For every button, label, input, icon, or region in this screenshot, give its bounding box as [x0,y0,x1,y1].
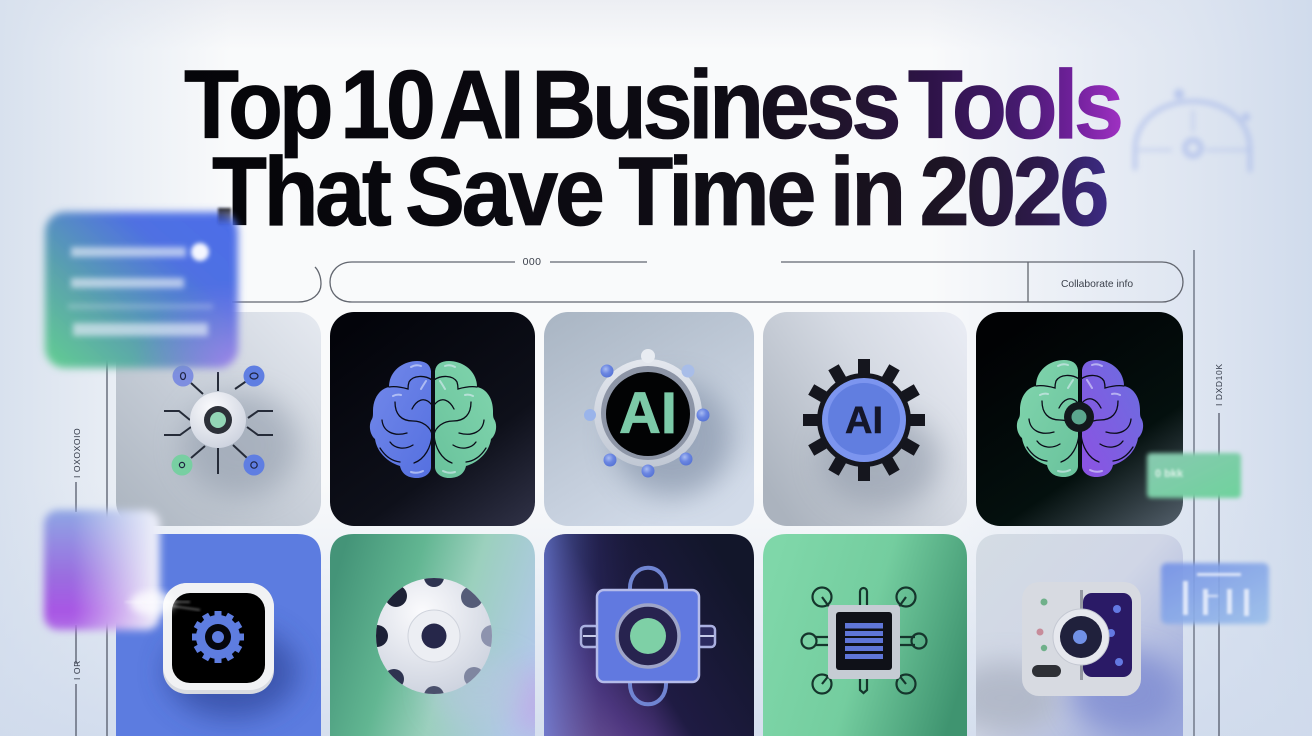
header frame left [232,267,321,302]
floating panel: green status chip: 0 bkk [1155,468,1184,480]
card 6: gear app icon [116,534,321,736]
floating panel: blue mini chart [1161,563,1269,624]
title line 1: Top 10 AI Business Tools [184,50,1121,159]
AI label: AI [619,381,677,446]
card 3: AI dial [544,312,754,526]
card 7: dotted disc [330,534,557,736]
floating panel: green status chip [1147,453,1241,498]
card 4: AI gear [763,312,967,526]
floating panel: blurred summary card [45,208,238,368]
card 2: brain blue and green [330,312,535,526]
AI label: AI [845,400,883,442]
header dots label: 000 [523,256,541,268]
header frame main [330,256,1183,302]
card 5: brain green and purple [976,312,1183,526]
rotated label: left upper: I OXOXOIO [72,428,82,478]
card 9: chip [763,534,967,736]
card 8: square lens module [544,534,754,736]
card 1: network hub [116,312,321,526]
rotated label: left lower: I OR [72,660,82,680]
card 10: device with lens [976,534,1183,736]
rotated label: right: I DXD10K [1214,363,1224,406]
title line 2: That Save Time in 2026 [212,137,1107,246]
vertical guide lines [76,250,1219,736]
header right label: Collaborate info [1061,279,1133,290]
icon: blurred gauge [1135,91,1250,172]
title [184,50,1121,246]
floating panel: purple glass tile [44,510,200,630]
